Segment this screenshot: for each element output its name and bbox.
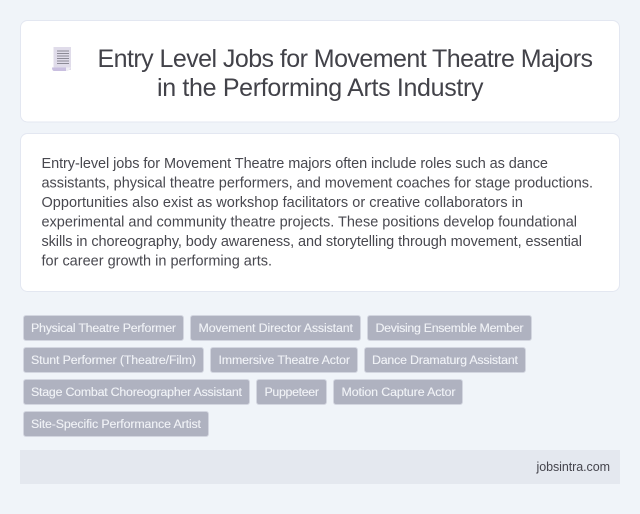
- tag: Motion Capture Actor: Motion Capture Actor: [342, 385, 456, 399]
- tag: Stunt Performer: Stunt Performer (Theatre/Film): [31, 353, 196, 367]
- text block: description: [42, 156, 593, 270]
- title: [98, 45, 593, 102]
- tag: Stage Combat Choreographer Assistant: [24, 380, 250, 404]
- text block: description: experimental and community theatre projects. These positions develop foundational: [42, 214, 577, 230]
- tag: Devising Ensemble Member: [368, 316, 532, 340]
- tag: Motion Capture Actor: [334, 380, 462, 404]
- text block: description: skills in choreography, body awareness, and storytelling through movement, essential: [42, 234, 582, 250]
- tag: Movement Director Assistant: [190, 316, 360, 340]
- panel: description: [20, 134, 620, 292]
- tag: Puppeteer: [256, 380, 326, 404]
- tag: Stunt Performer: [24, 348, 204, 372]
- tag: Dance Dramaturg Assistant: Dance Dramaturg Assistant: [372, 353, 519, 367]
- text block: description: Opportunities also exist as workshop facilitators or creative collaborators in: [42, 195, 523, 211]
- tag: Physical Theatre Performer: Physical Theatre Performer: [31, 321, 176, 335]
- tag: Site-Specific Performance Artist: [24, 412, 208, 436]
- icon: document scroll: [52, 47, 71, 71]
- tags: job titles: [24, 316, 532, 436]
- text block: description: assistants, physical theatre performers, and movement coaches for stage productions.: [42, 176, 593, 192]
- tag: Dance Dramaturg Assistant: [364, 348, 526, 372]
- tag: Movement Director Assistant: Movement Director Assistant: [198, 321, 354, 335]
- title: Entry Level Jobs for Movement Theatre Majors: [98, 45, 593, 73]
- tag: Devising Ensemble Member: Devising Ensemble Member: [376, 321, 524, 335]
- tag: Immersive Theatre Actor: Immersive Theatre Actor: [218, 353, 350, 367]
- title: in the Performing Arts Industry: [157, 74, 484, 102]
- tag: Site-Specific Performance Artist: Site-Specific Performance Artist: [31, 417, 202, 431]
- tag: Stage Combat Choreographer Assistant: Stage Combat Choreographer Assistant: [31, 385, 243, 399]
- tag: Puppeteer: Puppeteer: [264, 385, 319, 399]
- text block: description: for career growth in performing arts.: [42, 254, 272, 270]
- tag: Immersive Theatre Actor: [210, 348, 358, 372]
- footer: jobsintra.com: [536, 460, 610, 474]
- text block: description: Entry-level jobs for Movement Theatre majors often include roles such as dance: [42, 156, 548, 172]
- panel: header: [20, 20, 620, 122]
- footer: [20, 450, 620, 484]
- tag: Physical Theatre Performer: [24, 316, 184, 340]
